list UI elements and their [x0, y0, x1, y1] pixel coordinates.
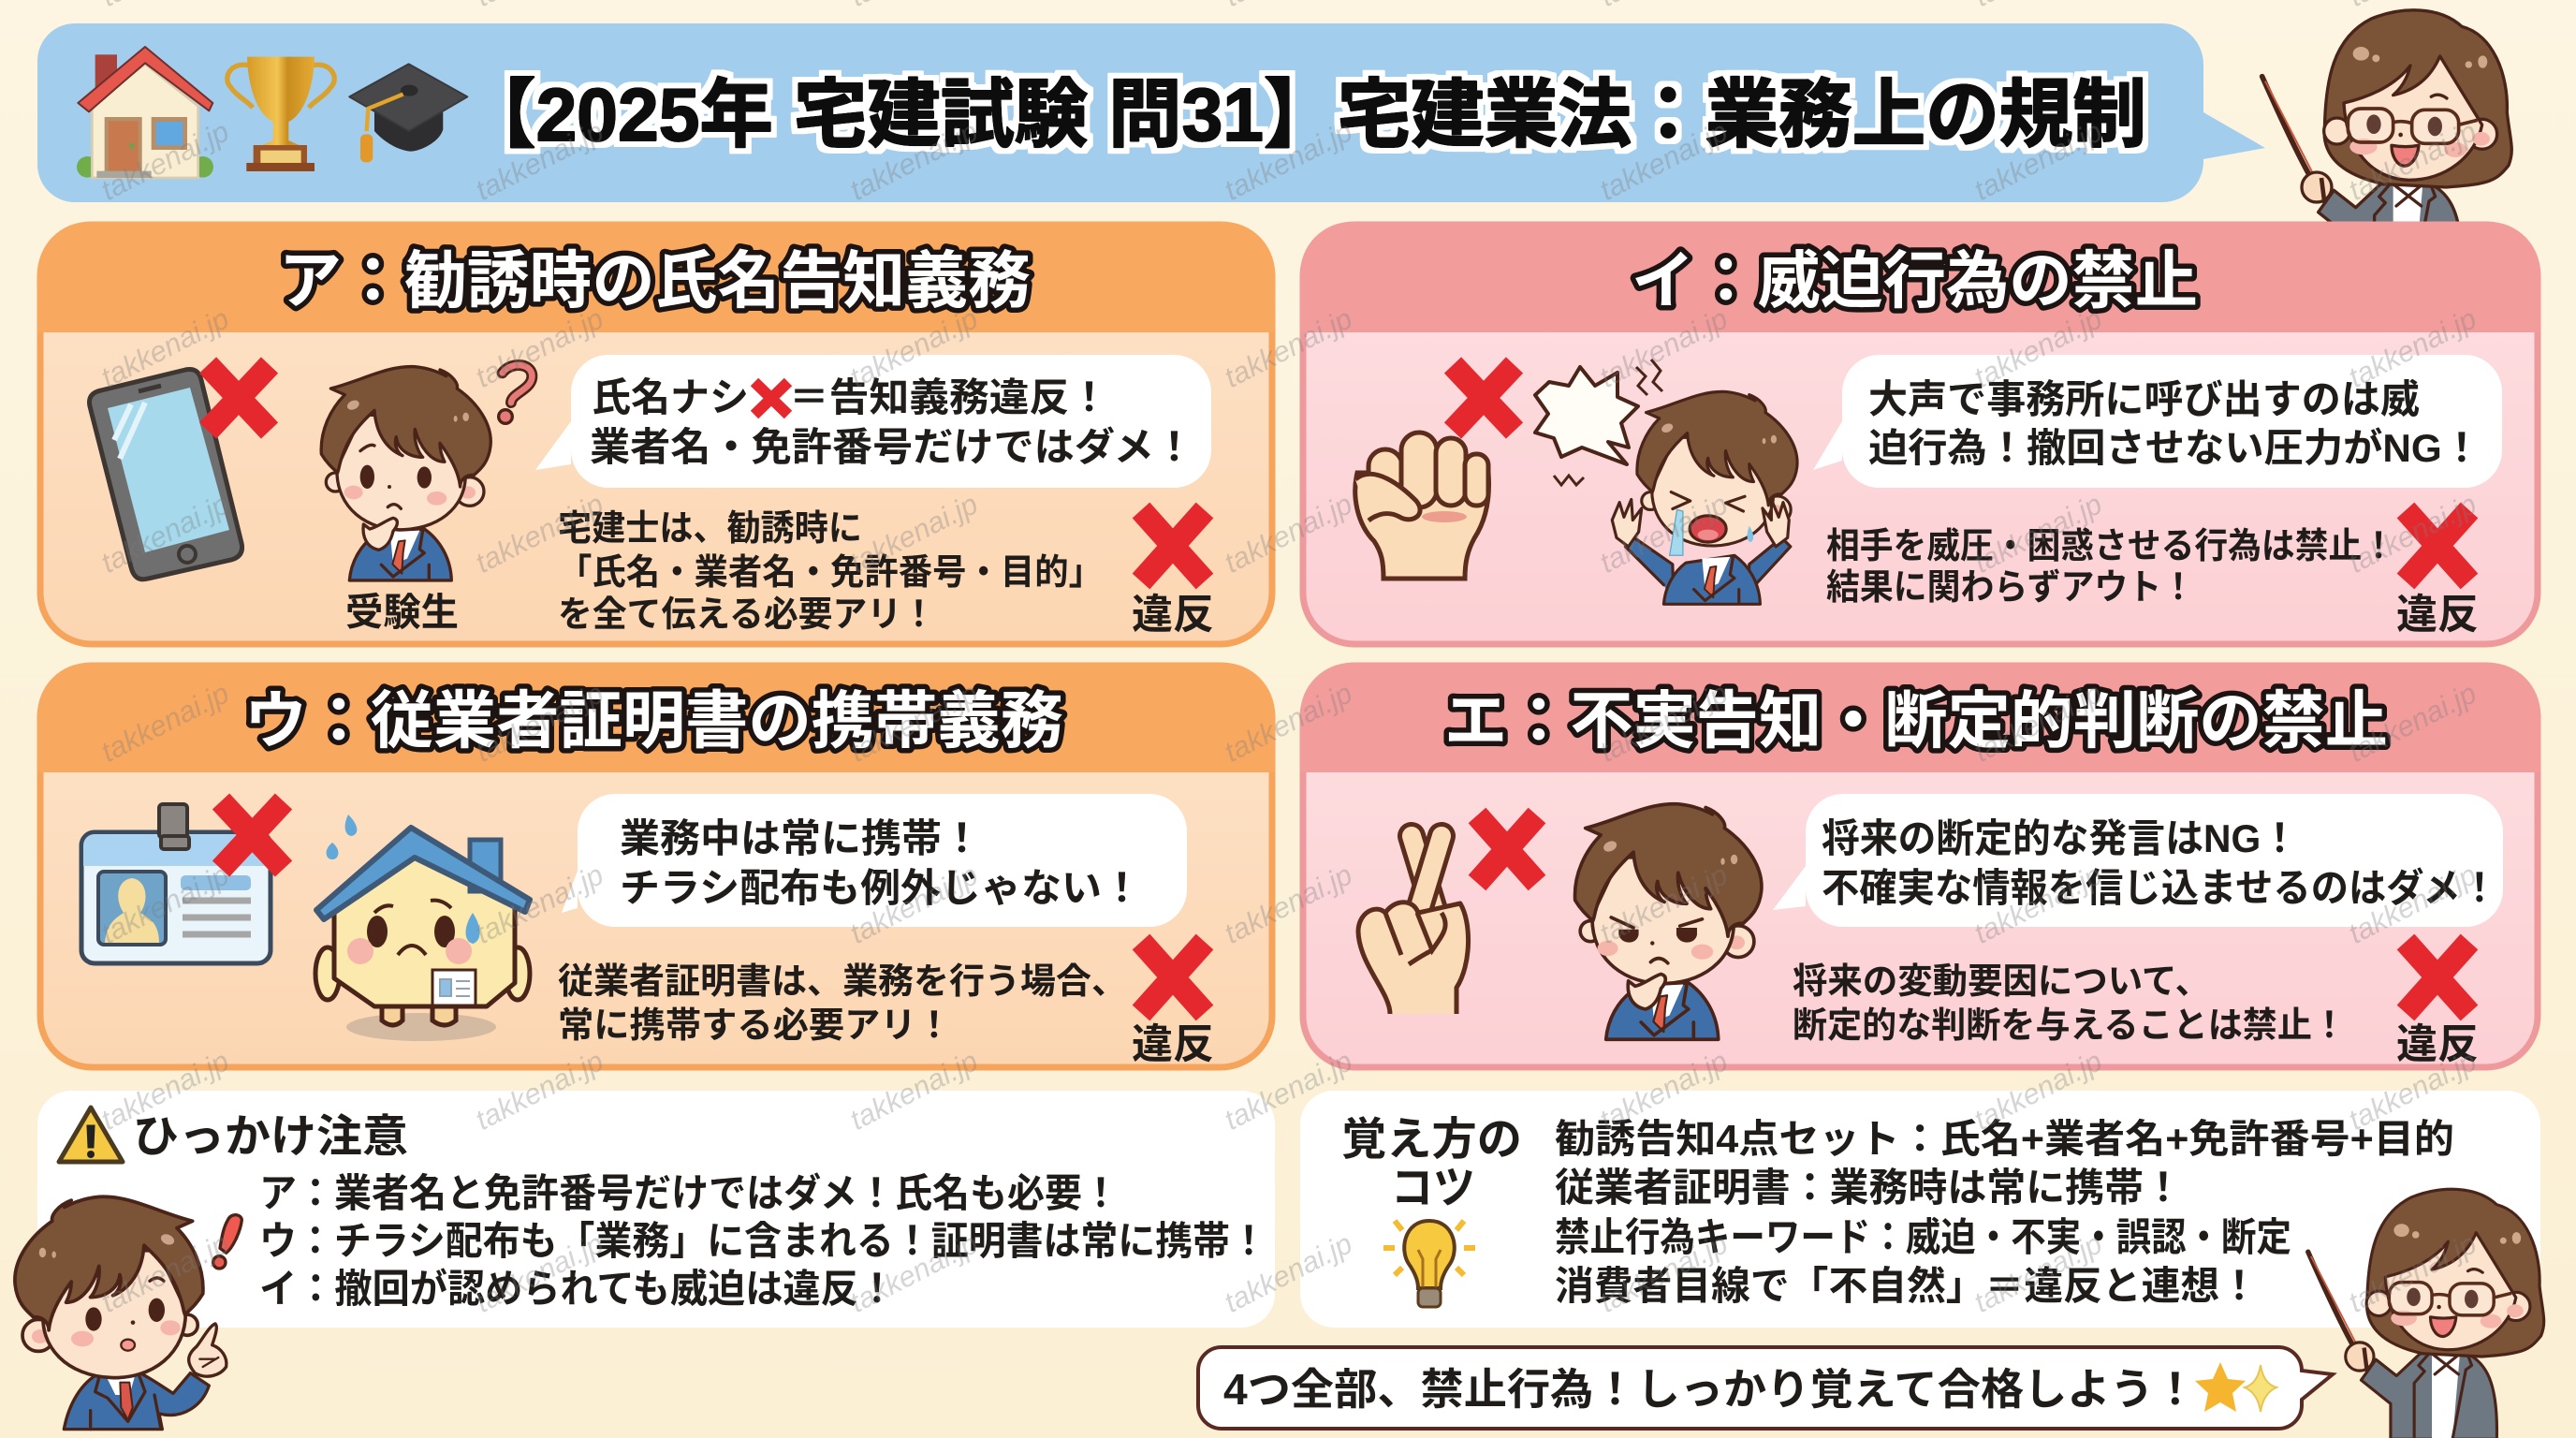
speech bubble: 氏名ナシ: [592, 375, 749, 419]
watermarks: takkenai.jp: [1594, 487, 1733, 580]
watermarks: takkenai.jp: [95, 487, 234, 580]
heading: 覚え方の: [1341, 1115, 1522, 1165]
trap list: [259, 1171, 1267, 1311]
icon: graduation cap: [349, 64, 467, 162]
explanation text: 従業者証明書は、業務を行う場合、: [558, 962, 1127, 1002]
speech bubble: 業者名・免許番号だけではダメ！: [590, 425, 1194, 469]
watermarks: takkenai.jp: [1969, 301, 2107, 394]
icon: star: [2195, 1362, 2246, 1412]
character: doubtful student: [1575, 804, 1762, 1039]
explanation text: 断定的な判断を与えることは禁止！: [1793, 1006, 2347, 1046]
watermarks: takkenai.jp: [1219, 676, 1357, 769]
watermarks: takkenai.jp: [844, 1044, 983, 1137]
icon: trophy: [227, 57, 334, 171]
heading: ア：勧誘時の氏名告知義務: [279, 246, 1031, 316]
watermarks: takkenai.jp: [95, 1044, 234, 1137]
watermarks: takkenai.jp: [844, 114, 983, 207]
watermarks: takkenai.jp: [1594, 114, 1733, 207]
character: worried house: [315, 814, 530, 1041]
panel: ウ 従業者証明書の携帯義務: [37, 663, 1275, 1067]
heading: イ：威迫行為の禁止: [1632, 246, 2198, 316]
icon: crossed fingers: [1358, 836, 1469, 1014]
watermarks: takkenai.jp: [1594, 301, 1733, 394]
icon: smartphone: [90, 369, 242, 580]
watermarks: takkenai.jp: [1969, 1044, 2107, 1137]
heading: ウ：従業者証明書の携帯義務: [244, 686, 1063, 756]
speech bubble: 迫行為！撤回させない圧力がNG！: [1868, 426, 2481, 470]
trap list: ア：業者名と免許番号だけではダメ！氏名も必要！: [259, 1171, 1120, 1215]
panel: ア 勧誘時の氏名告知義務: [37, 222, 1275, 644]
watermarks: takkenai.jp: [1594, 1226, 1733, 1319]
watermarks: takkenai.jp: [470, 858, 608, 950]
watermarks: takkenai.jp: [1219, 1044, 1357, 1137]
character: crying student: [1612, 391, 1797, 604]
watermarks: takkenai.jp: [844, 676, 983, 769]
tips list: 消費者目線で「不自然」＝違反と連想！: [1555, 1264, 2259, 1308]
speech bubble: [535, 355, 1211, 488]
watermarks: takkenai.jp: [1219, 1226, 1357, 1319]
closing speech bubble: [1198, 1347, 2333, 1429]
watermarks: takkenai.jp: [95, 301, 234, 394]
watermarks: takkenai.jp: [95, 114, 234, 207]
watermarks: takkenai.jp: [1219, 114, 1357, 207]
watermarks: takkenai.jp: [844, 301, 983, 394]
icon: small red cross: [221, 801, 284, 869]
explanation text: 「氏名・業者名・免許番号・目的」: [558, 553, 1103, 593]
icon: light bulb: [1383, 1221, 1475, 1307]
watermarks: takkenai.jp: [470, 1226, 608, 1319]
verdict: violation: [2396, 942, 2479, 1067]
explanation text: を全て伝える必要アリ！: [558, 595, 936, 635]
explanation text: [558, 509, 1103, 635]
title banner: [37, 23, 2265, 202]
icon: house: [77, 47, 213, 178]
watermarks: takkenai.jp: [1594, 1044, 1733, 1137]
icon: small red cross: [208, 365, 270, 431]
heading: [1341, 1115, 1522, 1213]
explanation text: 常に携帯する必要アリ！: [558, 1006, 952, 1046]
explanation text: [1793, 962, 2347, 1046]
icon: sparkles: [2245, 1365, 2276, 1412]
verdict: violation: 違反: [1132, 1021, 1214, 1067]
watermarks: takkenai.jp: [2343, 114, 2481, 207]
title: 【2025年 宅建試験 問31】宅建業法：業務上の規制: [462, 73, 2146, 156]
verdict: violation: [2396, 510, 2479, 638]
heading: コツ: [1391, 1164, 1475, 1213]
watermarks: takkenai.jp: [470, 301, 608, 394]
character: pointing student: [15, 1196, 242, 1430]
watermarks: takkenai.jp: [844, 1226, 983, 1319]
trap list: ウ：チラシ配布も「業務」に含まれる！証明書は常に携帯！: [259, 1219, 1267, 1263]
speech bubble: 業務中は常に携帯！: [620, 816, 982, 860]
watermarks: takkenai.jp: [1969, 858, 2107, 950]
speech bubble: [1773, 794, 2503, 927]
icon: shout burst: [1535, 360, 1662, 485]
icon: fist: [1355, 433, 1488, 579]
verdict: violation: [1132, 942, 1214, 1067]
speech bubble: 不確実な情報を信じ込ませるのはダメ！: [1822, 866, 2498, 910]
watermarks: takkenai.jp: [95, 1226, 234, 1319]
watermarks: takkenai.jp: [1594, 676, 1733, 769]
closing speech bubble: 4つ全部、禁止行為！しっかり覚えて合格しよう！: [1223, 1365, 2197, 1414]
watermarks: takkenai.jp: [1594, 858, 1733, 950]
watermarks: takkenai.jp: [95, 676, 234, 769]
watermarks: takkenai.jp: [2343, 1226, 2481, 1319]
watermarks: takkenai.jp: [1969, 1226, 2107, 1319]
watermarks: takkenai.jp: [1969, 487, 2107, 580]
speech bubble: ＝告知義務違反！: [789, 375, 1109, 419]
verdict: violation: [1132, 510, 1214, 638]
watermarks: takkenai.jp: [1969, 114, 2107, 207]
icon: small red cross: [1453, 365, 1515, 431]
watermarks: takkenai.jp: [2343, 1044, 2481, 1137]
explanation text: [1826, 527, 2395, 608]
speech bubble: 大声で事務所に呼び出すのは威: [1868, 377, 2420, 421]
watermarks: takkenai.jp: [2343, 301, 2481, 394]
heading: エ：不実告知・断定的判断の禁止: [1444, 686, 2388, 756]
watermarks: takkenai.jp: [2343, 858, 2481, 950]
watermarks: takkenai.jp: [95, 858, 234, 950]
watermarks: takkenai.jp: [470, 676, 608, 769]
teacher character: top right: [2262, 10, 2511, 274]
speech bubble: [562, 794, 1187, 927]
panel: エ 不実告知・断定的判断の禁止: [1300, 663, 2540, 1067]
icon: warning sign: [59, 1108, 123, 1162]
icon: small red cross: [1477, 815, 1537, 883]
tips list: [1555, 1117, 2454, 1308]
tips list: 従業者証明書：業務時は常に携帯！: [1555, 1166, 2183, 1210]
icon: employee ID card: [81, 804, 271, 963]
watermarks: takkenai.jp: [844, 858, 983, 950]
label: student: 受験生: [345, 591, 459, 634]
panel: memory tips: [1300, 1091, 2540, 1328]
verdict: violation: 違反: [2396, 592, 2479, 638]
watermarks: takkenai.jp: [1219, 301, 1357, 394]
teacher character: bottom right: [2308, 1189, 2544, 1438]
explanation text: 相手を威圧・困惑させる行為は禁止！: [1826, 527, 2395, 566]
speech bubble: [1813, 355, 2502, 488]
verdict: violation: 違反: [2396, 1021, 2479, 1067]
speech bubble: チラシ配布も例外じゃない！: [620, 866, 1142, 910]
panel: イ 威迫行為の禁止: [1300, 222, 2540, 644]
watermarks: takkenai.jp: [2343, 487, 2481, 580]
tips list: 勧誘告知4点セット：氏名+業者名+免許番号+目的: [1555, 1117, 2454, 1161]
explanation text: 結果に関わらずアウト！: [1826, 568, 2195, 608]
speech bubble: 将来の断定的な発言はNG！: [1822, 816, 2299, 860]
verdict: violation: 違反: [1132, 592, 1214, 638]
explanation text: 将来の変動要因について、: [1793, 962, 2210, 1002]
watermarks: takkenai.jp: [844, 487, 983, 580]
watermarks: takkenai.jp: [1969, 676, 2107, 769]
explanation text: [558, 962, 1127, 1046]
watermarks: takkenai.jp: [470, 487, 608, 580]
watermarks: takkenai.jp: [2343, 676, 2481, 769]
watermarks: takkenai.jp: [1219, 487, 1357, 580]
character: thinking student: [321, 365, 532, 580]
watermarks: takkenai.jp: [1219, 858, 1357, 950]
trap list: イ：撤回が認められても威迫は違反！: [259, 1267, 896, 1311]
tips list: 禁止行為キーワード：威迫・不実・誤認・断定: [1555, 1215, 2291, 1259]
watermarks: takkenai.jp: [470, 1044, 608, 1137]
explanation text: 宅建士は、勧誘時に: [558, 509, 862, 549]
panel: trap warnings: [37, 1091, 1275, 1328]
watermarks: takkenai.jp: [470, 114, 608, 207]
heading: ひっかけ注意: [133, 1112, 408, 1162]
